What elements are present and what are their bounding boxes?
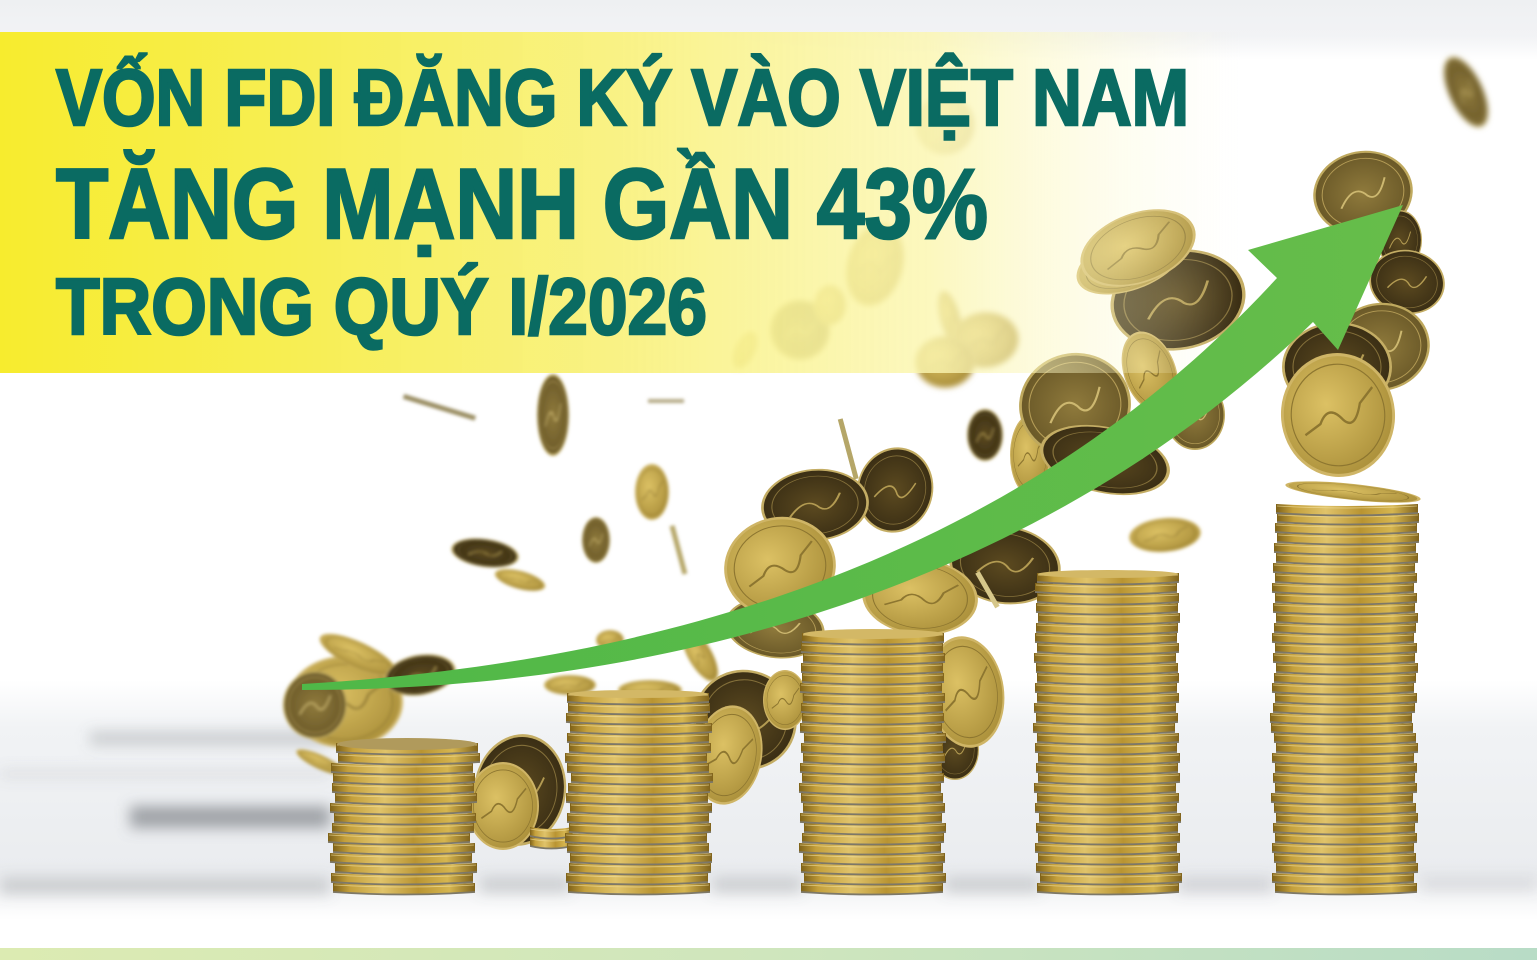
coin stack 5 [1270,504,1419,894]
title: TĂNG MẠNH GẦN 43% [56,148,988,259]
coins behind the stacks [467,418,1066,852]
coin stack 2 [565,690,713,894]
arrow [302,205,1403,690]
title [56,53,1189,351]
coin stack 1 [328,738,480,894]
scattered falling coins [283,374,1202,779]
coin stack 3 [799,629,946,894]
banner [0,32,1240,373]
title: TRONG QUÝ I/2026 [56,262,707,351]
bottom bar [0,948,1537,960]
far blurred coins [428,50,1497,388]
coin stack 4 [1033,570,1182,894]
title: VỐN FDI ĐĂNG KÝ VÀO VIỆT NAM [56,53,1189,142]
coin cluster: upper middle [1010,195,1254,506]
coin cluster: falling onto tallest stack [1276,143,1450,507]
